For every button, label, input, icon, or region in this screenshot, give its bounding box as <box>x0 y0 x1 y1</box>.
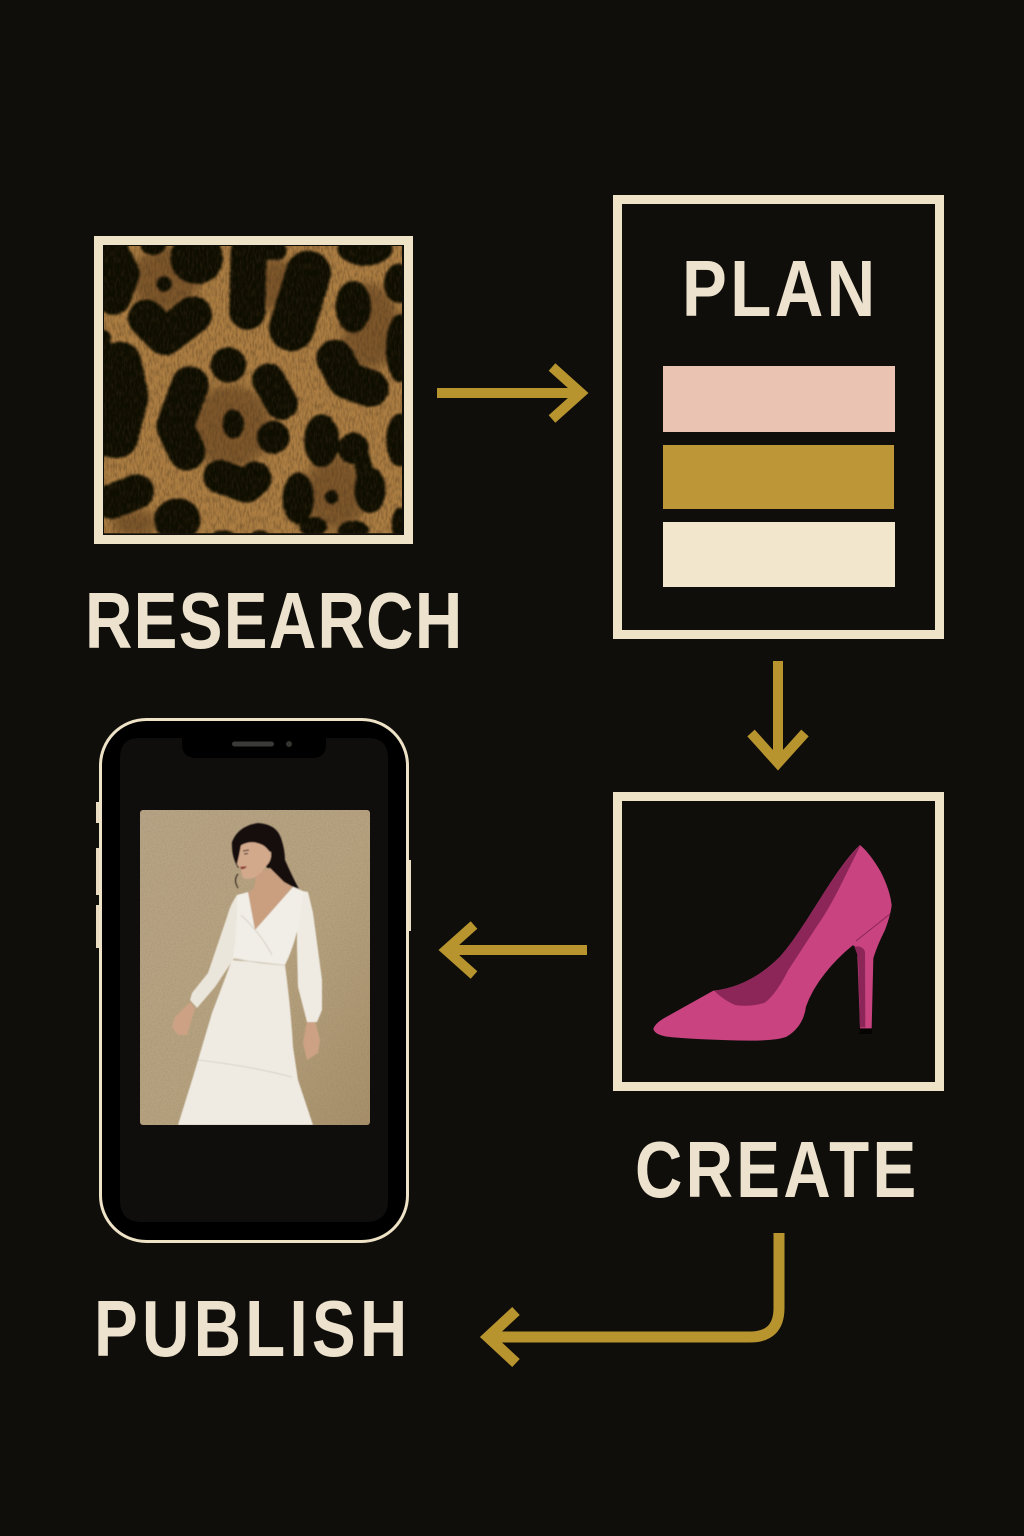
side buttons <box>96 802 411 948</box>
panel: create <box>618 796 940 1214</box>
plan frame <box>618 200 940 634</box>
hair front <box>235 844 272 864</box>
face <box>236 842 271 879</box>
hair back <box>232 823 299 889</box>
woman in white dress <box>172 823 322 1125</box>
workflow infographic <box>89 195 944 1367</box>
arrow: plan to create <box>751 661 805 763</box>
panel: plan <box>618 200 940 634</box>
arrow: create to publish <box>488 1233 779 1363</box>
label: publish: PUBLISH <box>94 1284 407 1373</box>
left sleeve <box>190 895 238 1008</box>
photo backdrop <box>140 810 370 1125</box>
icon: pink high heel shoe <box>653 845 892 1041</box>
phone screen <box>120 738 388 1222</box>
fashion photo <box>140 810 370 1125</box>
heel shadow <box>854 946 865 1027</box>
label: research: RESEARCH <box>85 576 462 665</box>
shoe interior <box>714 845 861 1006</box>
label: plan: PLAN <box>682 243 875 333</box>
colour swatch: blush <box>663 366 895 432</box>
lips <box>240 866 247 869</box>
heel seam <box>856 914 890 941</box>
arrow: create to phone <box>446 925 587 975</box>
leopard print texture <box>104 246 402 534</box>
bodice <box>233 887 303 965</box>
skirt <box>178 960 313 1125</box>
phone body <box>100 720 408 1242</box>
left hand <box>172 1002 195 1035</box>
stray curl <box>236 874 238 888</box>
create frame <box>618 796 940 1086</box>
image frame <box>98 240 408 540</box>
right sleeve <box>297 890 322 1022</box>
colour swatch: cream <box>663 522 895 587</box>
label: create: CREATE <box>635 1125 916 1214</box>
arrow: research to plan <box>437 367 581 419</box>
shoe body <box>653 845 892 1041</box>
camera <box>286 741 292 747</box>
panel: publish <box>94 720 411 1373</box>
eye and brow <box>243 850 249 854</box>
right hand <box>303 1021 320 1060</box>
waistband and tier lines <box>198 915 292 1077</box>
panel: research <box>85 233 462 665</box>
colour swatch: gold <box>663 445 894 509</box>
speaker <box>232 742 274 746</box>
heel tip <box>859 1027 872 1034</box>
neck and chest <box>248 868 293 931</box>
